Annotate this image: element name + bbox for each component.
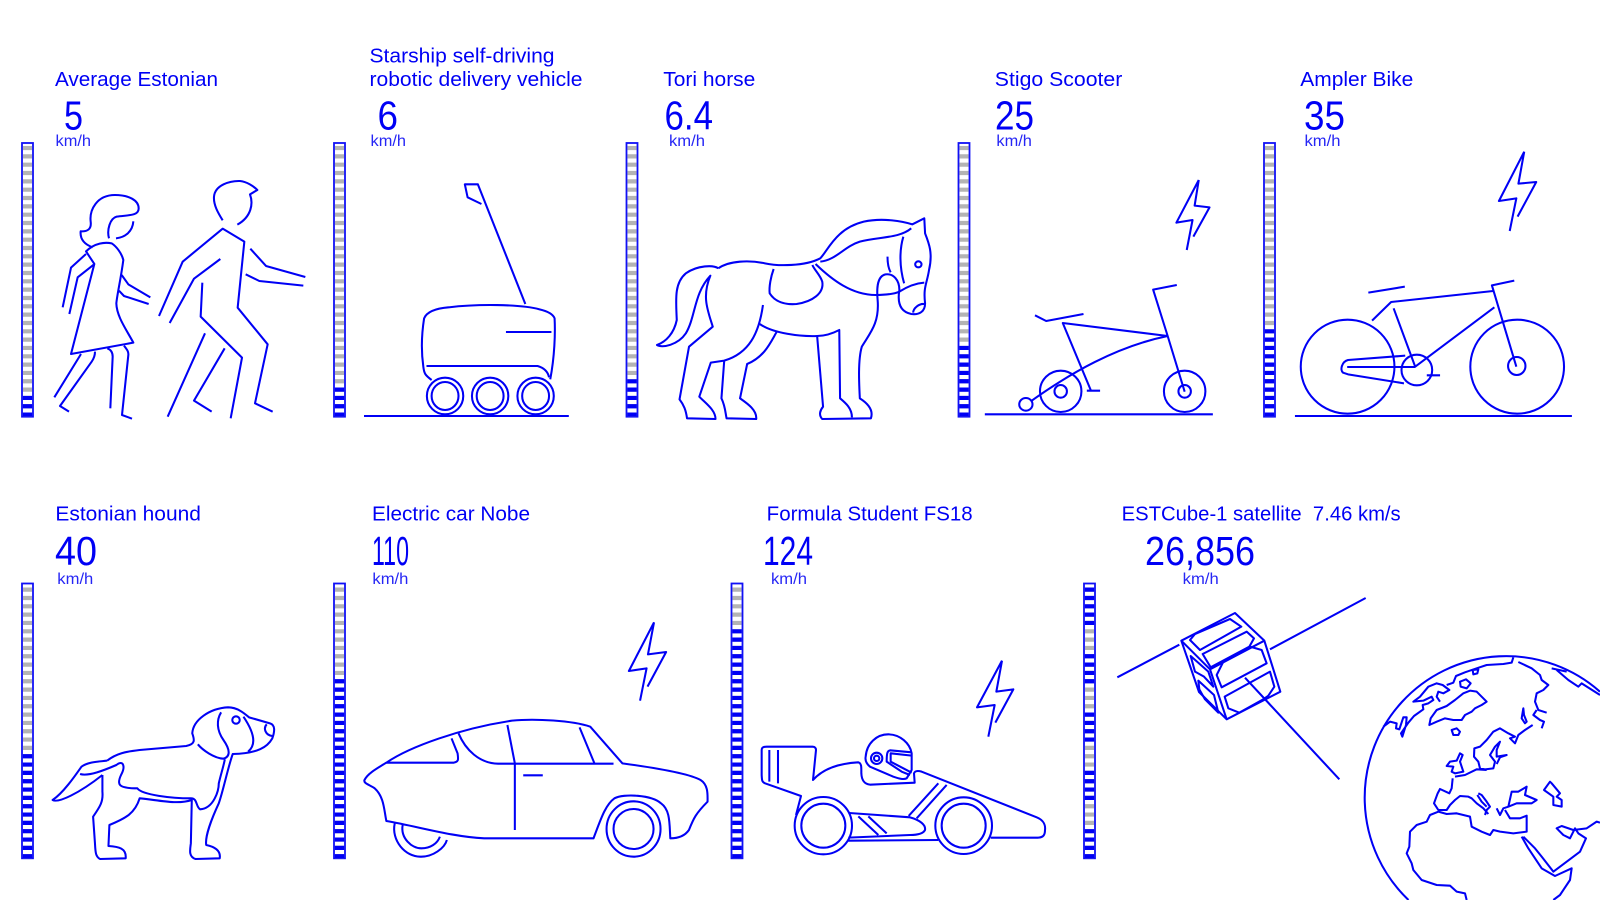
- unit: km/h: km/h: [57, 571, 93, 588]
- speed bar: 35 km/h: [1264, 143, 1275, 417]
- panel: Ampler Bike: [1264, 69, 1572, 417]
- heading: Formula Student FS18: Formula Student FS18: [767, 504, 973, 526]
- heading: Electric car Nobe: Electric car Nobe: [372, 504, 530, 526]
- speed bar: 6 km/h: [334, 143, 345, 417]
- speed value: 35: 35: [1304, 92, 1345, 138]
- heading: Estonian hound: Estonian hound: [55, 504, 201, 526]
- speed value: 26,856: 26,856: [1145, 528, 1255, 574]
- icon: hound: [53, 707, 274, 859]
- icon: horse: [657, 218, 931, 419]
- icon: satellite: [1117, 598, 1366, 779]
- panel: Starship delivery robot: [334, 46, 582, 417]
- heading: Average Estonian: Average Estonian: [55, 69, 218, 91]
- speed value: 124: 124: [763, 528, 813, 574]
- icon: bike: [1295, 152, 1572, 416]
- speed bar: 124 km/h: [732, 584, 742, 858]
- globe continents: [1383, 657, 1600, 900]
- speed value: 5: 5: [64, 92, 83, 138]
- panel: Stigo Scooter: [958, 69, 1213, 417]
- unit: km/h: km/h: [1304, 133, 1340, 150]
- icon: globe: [1365, 656, 1600, 900]
- unit: km/h: km/h: [669, 133, 705, 150]
- panel: Average Estonian: [22, 69, 305, 419]
- heading: Stigo Scooter: Stigo Scooter: [995, 69, 1123, 91]
- panel: Tori horse: [626, 69, 931, 419]
- unit: km/h: km/h: [771, 571, 807, 588]
- speed bar: 5 km/h: [22, 143, 33, 417]
- panel: Formula Student FS18: [732, 504, 1045, 858]
- speed value: 25: 25: [995, 92, 1034, 138]
- icon: delivery robot: [364, 184, 569, 416]
- unit: km/h: km/h: [372, 571, 408, 588]
- panel: Electric car Nobe: [334, 504, 708, 858]
- icon: race car: [762, 661, 1045, 854]
- speed value: 6: 6: [378, 92, 398, 138]
- panel: ESTCube-1 satellite: [1084, 504, 1600, 900]
- icon: walking people: [54, 181, 305, 419]
- speed bar: 110 km/h: [334, 584, 345, 858]
- unit: km/h: km/h: [56, 133, 91, 150]
- heading: Ampler Bike: Ampler Bike: [1300, 69, 1413, 91]
- speed bar: 25 km/h: [958, 143, 970, 417]
- speed value: 40: 40: [55, 528, 97, 574]
- heading line two: robotic delivery vehicle: [370, 69, 582, 91]
- icon: car: [364, 622, 708, 857]
- speed value: 110: 110: [372, 528, 409, 574]
- panel: Estonian hound: [22, 504, 274, 859]
- heading: ESTCube-1 satellite 7.46 km/s: ESTCube-1 satellite 7.46 km/s: [1122, 504, 1401, 526]
- speed bar: 40 km/h: [22, 584, 33, 858]
- speed bar: 26,856 km/h: [1084, 584, 1095, 858]
- unit: km/h: km/h: [370, 133, 406, 150]
- icon: scooter: [985, 180, 1213, 414]
- speed bar: 6.4 km/h: [626, 143, 638, 417]
- unit: km/h: km/h: [996, 133, 1032, 150]
- speed value: 6.4: 6.4: [664, 92, 713, 138]
- unit: km/h: km/h: [1183, 571, 1219, 588]
- heading: Starship self-driving robotic delivery vehicle: Starship self-driving: [370, 46, 554, 68]
- heading: Tori horse: Tori horse: [663, 69, 755, 91]
